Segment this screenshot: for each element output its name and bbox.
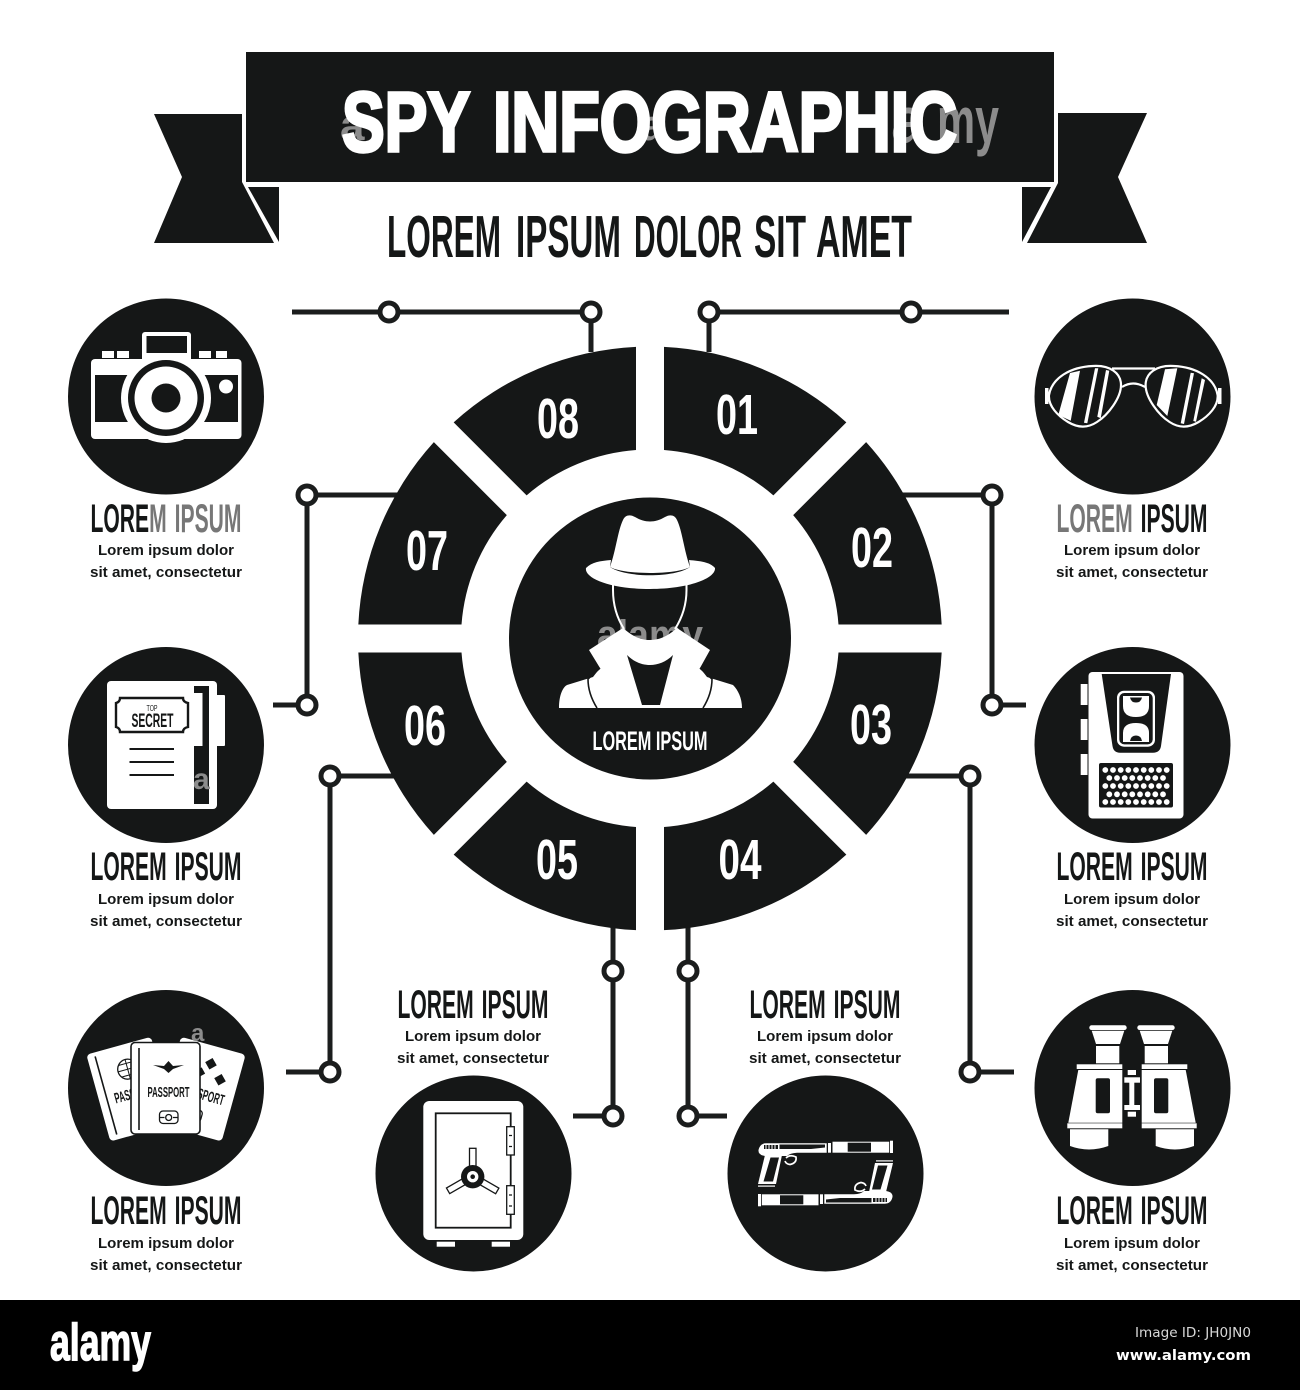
segment 01 [664, 347, 846, 495]
label: top secret file [90, 845, 242, 930]
icon: camera [68, 298, 264, 494]
icon: sunglasses [1034, 298, 1230, 494]
segment 07 [358, 442, 507, 624]
label: safe: sit amet, consectetur [397, 1050, 549, 1067]
title: my [937, 83, 999, 157]
connector: segment 04 to guns [679, 925, 727, 1125]
segment 05: 05 [536, 828, 578, 892]
segment 01: 01 [716, 383, 758, 447]
top secret plaque: SECRET [132, 711, 174, 732]
segment 06 [358, 652, 507, 835]
segment 05 [454, 782, 636, 930]
footer logo: alamy [50, 1314, 151, 1372]
icon: spy hat [586, 515, 715, 589]
label: passports: LOREM IPSUM [90, 1189, 242, 1233]
label: top secret file: LOREM IPSUM [90, 845, 242, 889]
label: recorder [1056, 845, 1208, 930]
subtitle: AMET [816, 204, 912, 270]
right passport [157, 1037, 246, 1141]
icon: passports: a [191, 1020, 205, 1047]
label: camera: Lorem ipsum dolor [98, 542, 234, 559]
subtitle [387, 204, 912, 270]
subtitle: IPSUM [516, 204, 621, 270]
lower pistol [758, 1160, 893, 1206]
ring chart: eight numbered segments [358, 347, 942, 930]
center hinge [1124, 1070, 1140, 1117]
segment 03: 03 [850, 693, 892, 757]
connector: segment 08 to camera [292, 303, 600, 352]
title: INFOGRAPHIC [493, 75, 957, 169]
center passport: PASSPORT [148, 1084, 190, 1101]
center circle: spy figure: alamy [597, 613, 704, 657]
right barrel [1137, 1025, 1197, 1150]
label: passports: sit amet, consectetur [90, 1257, 242, 1274]
label: sunglasses: Lorem ipsum dolor [1064, 542, 1200, 559]
segment 08 [454, 347, 636, 495]
segment 02: 02 [851, 516, 893, 580]
footer bar [0, 1300, 1300, 1390]
title [340, 75, 999, 169]
image id: Image ID: JH0JN0 [1135, 1325, 1251, 1341]
subtitle: LOREM [387, 204, 501, 270]
title: SPY [342, 75, 470, 169]
label: camera [90, 497, 242, 581]
segment 07: 07 [406, 519, 448, 583]
safe hinges [507, 1127, 514, 1214]
left passport [86, 1037, 175, 1141]
title: a [891, 83, 927, 157]
icon: top secret file: a [193, 763, 210, 796]
label: safe: Lorem ipsum dolor [405, 1028, 541, 1045]
label: guns: sit amet, consectetur [749, 1050, 901, 1067]
icon: spy coat [559, 628, 742, 708]
recorder keypad [1102, 767, 1170, 805]
connector: segment 03 to binoculars [900, 767, 1014, 1081]
label: top secret file: Lorem ipsum dolor [98, 891, 234, 908]
top secret plaque [116, 698, 188, 732]
connector: segment 06 to passports [286, 767, 400, 1081]
icon: top secret file [68, 647, 264, 843]
center label: LOREM IPSUM [592, 726, 708, 756]
label: top secret file: sit amet, consectetur [90, 913, 242, 930]
label: sunglasses: sit amet, consectetur [1056, 564, 1208, 581]
icon: passports [68, 990, 264, 1186]
title: a [640, 101, 665, 150]
center passport [131, 1042, 200, 1134]
left barrel [1067, 1025, 1127, 1150]
icon: spy head outline [613, 585, 686, 629]
center circle: spy figure [509, 498, 791, 780]
icon: pistols with silencers [728, 1076, 924, 1272]
label: binoculars: Lorem ipsum dolor [1064, 1235, 1200, 1252]
label: camera: LOREM IPSUM [90, 497, 242, 541]
connector: segment 07 to secret file [273, 486, 405, 714]
icon: binoculars [1034, 990, 1230, 1186]
connector: segment 05 to safe [573, 925, 622, 1125]
title ribbon [154, 52, 1147, 243]
title: a [340, 101, 365, 150]
label: recorder: sit amet, consectetur [1056, 913, 1208, 930]
segment 08: 08 [537, 387, 579, 451]
label: safe: LOREM IPSUM [398, 983, 548, 1027]
footer url: www.alamy.com [1116, 1348, 1251, 1364]
left passport: PASSPORT [113, 1080, 158, 1107]
label: binoculars [1056, 1189, 1208, 1274]
segment 04 [664, 782, 846, 930]
top secret plaque: TOP [146, 704, 158, 713]
label: binoculars: sit amet, consectetur [1056, 1257, 1208, 1274]
label: guns: Lorem ipsum dolor [757, 1028, 893, 1045]
segment 04: 04 [718, 828, 762, 892]
connector: segment 02 to recorder [895, 486, 1026, 714]
safe dial [446, 1148, 499, 1194]
label: safe [397, 983, 549, 1067]
label: guns [749, 983, 901, 1067]
label: passports [90, 1189, 242, 1274]
label: sunglasses: LOREM IPSUM [1056, 497, 1208, 541]
right passport: PASSPORT [180, 1081, 226, 1109]
label: guns: LOREM IPSUM [750, 983, 900, 1027]
segment 02 [793, 442, 942, 624]
segment 03 [793, 652, 942, 835]
segment 06: 06 [404, 694, 446, 758]
icon: recorder [1034, 647, 1230, 843]
label: passports: Lorem ipsum dolor [98, 1235, 234, 1252]
connector: segment 01 to sunglasses [700, 303, 1009, 352]
upper pistol [758, 1141, 893, 1187]
icon: safe [376, 1076, 572, 1272]
subtitle: SIT [754, 204, 806, 270]
label: sunglasses [1056, 497, 1208, 581]
label: camera: sit amet, consectetur [90, 564, 242, 581]
label: recorder: Lorem ipsum dolor [1064, 891, 1200, 908]
subtitle: DOLOR [634, 204, 742, 270]
